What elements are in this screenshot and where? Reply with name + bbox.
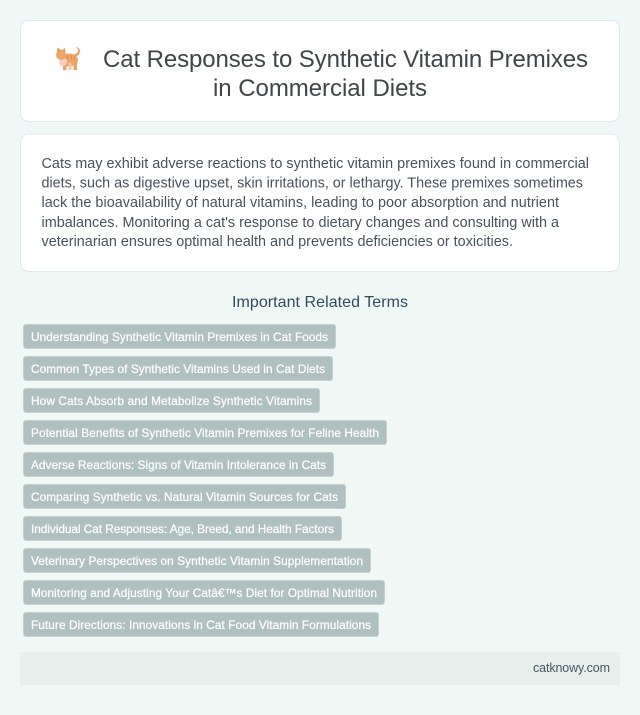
tag 5: Adverse Reactions: Signs of Vitamin Intolerance in Cats <box>31 458 326 472</box>
tag 8: Veterinary Perspectives on Synthetic Vitamin Supplementation <box>31 554 363 568</box>
tag 7 <box>24 516 342 540</box>
panel: related terms tags <box>24 324 386 636</box>
text block: summary: lack the bioavailability of natural vitamins, leading to poor absorption and nutrient <box>42 195 559 211</box>
tag 6: Comparing Synthetic vs. Natural Vitamin Sources for Cats <box>31 490 338 504</box>
tag 10: Future Directions: Innovations in Cat Food Vitamin Formulations <box>31 618 371 632</box>
heading: related terms: Important Related Terms <box>232 294 408 311</box>
tag 6 <box>24 484 346 508</box>
tag 4: Potential Benefits of Synthetic Vitamin Premixes for Feline Health <box>31 426 379 440</box>
text block: summary <box>42 156 589 250</box>
title: Cat Responses to Synthetic Vitamin Premixes <box>103 46 588 73</box>
tag 3 <box>24 388 320 412</box>
text block: summary: imbalances. Monitoring a cat's response to dietary changes and consulting with a <box>42 215 559 231</box>
icon: cat <box>56 47 80 70</box>
tag 5 <box>24 452 334 476</box>
text block: summary: veterinarian ensures optimal health and prevents deficiencies or toxicities. <box>42 234 513 250</box>
tag 1: Understanding Synthetic Vitamin Premixes in Cat Foods <box>31 330 328 344</box>
tag 7: Individual Cat Responses: Age, Breed, and Health Factors <box>31 522 334 536</box>
panel: title card <box>20 20 620 122</box>
text block: summary: Cats may exhibit adverse reactions to synthetic vitamin premixes found in commercial <box>42 156 589 172</box>
tag 3: How Cats Absorb and Metabolize Synthetic Vitamins <box>31 394 312 408</box>
tag 4 <box>24 420 386 444</box>
text block: summary: diets, such as digestive upset, skin irritations, or lethargy. These premixes sometimes <box>42 176 583 192</box>
panel: summary card <box>20 134 620 272</box>
tag 9 <box>24 580 384 604</box>
tag 9: Monitoring and Adjusting Your Catâ€™s Diet for Optimal Nutrition <box>31 586 377 600</box>
footer: catknowy.com <box>533 661 610 675</box>
tag 2 <box>24 356 332 380</box>
footer <box>20 652 620 685</box>
tag 10 <box>24 612 378 636</box>
tag 2: Common Types of Synthetic Vitamins Used in Cat Diets <box>31 362 325 376</box>
tag 1 <box>24 324 336 348</box>
tag 8 <box>24 548 370 572</box>
title <box>103 46 588 102</box>
title: in Commercial Diets <box>213 75 427 102</box>
